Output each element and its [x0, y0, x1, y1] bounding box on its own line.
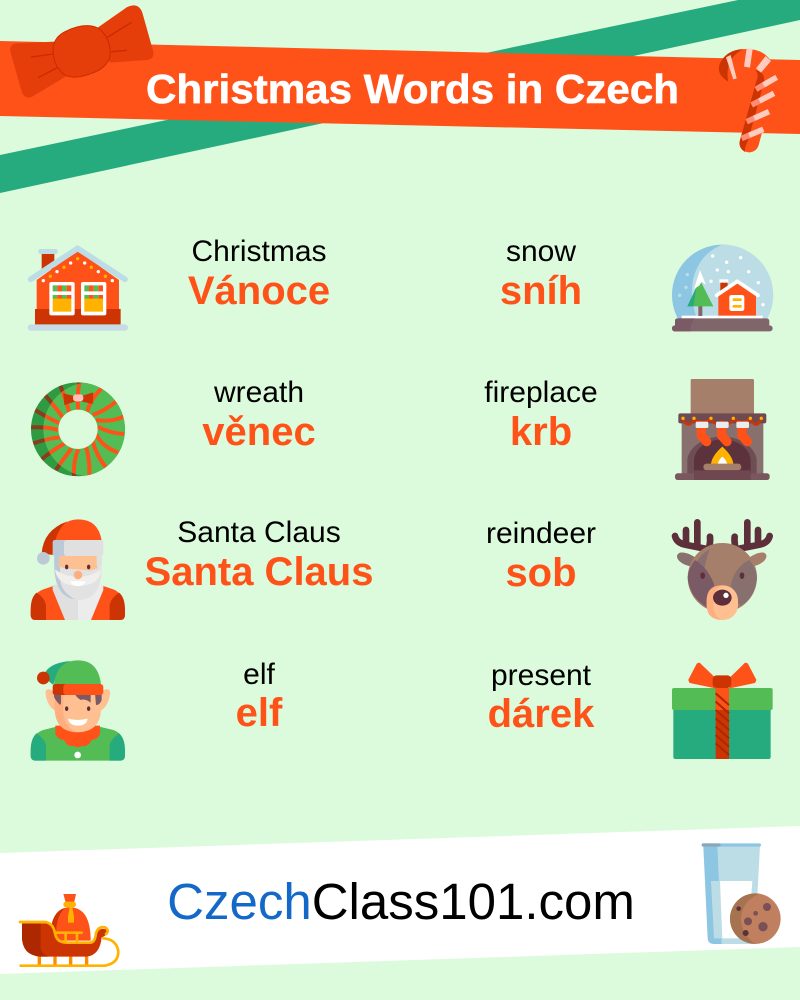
word pair: elf — [236, 658, 283, 735]
word pair: wreath: věnec — [202, 410, 316, 454]
word pair: fireplace — [484, 376, 598, 454]
word pair: reindeer: reindeer — [486, 517, 596, 550]
word pair: elf: elf — [243, 658, 276, 691]
word pair: fireplace: krb — [510, 410, 572, 454]
word pair: Christmas: Christmas — [191, 235, 327, 268]
word pair: elf: elf — [236, 691, 283, 735]
icon: sleigh with sack — [20, 894, 118, 966]
word pair: Christmas: Vánoce — [188, 269, 330, 313]
green diagonal band — [0, 0, 800, 193]
red title ribbon — [0, 41, 800, 134]
word pair: Santa Claus: Santa Claus — [145, 550, 373, 594]
icon: wreath — [31, 382, 125, 476]
word pair: reindeer — [486, 517, 596, 595]
icon: fireplace — [675, 379, 770, 480]
white footer band — [0, 826, 800, 974]
title: Christmas Words in Czech — [146, 66, 679, 112]
icon: Santa Claus — [31, 519, 125, 620]
icon: candy cane — [719, 48, 777, 152]
word pair: snow: sníh — [500, 269, 582, 313]
word pair: present: present — [491, 659, 592, 692]
icon: reindeer — [675, 522, 770, 620]
word pair: Santa Claus — [145, 516, 373, 594]
word pair: snow: snow — [506, 235, 576, 268]
footer website text: CzechClass101.com — [167, 873, 635, 930]
word pair: present: dárek — [488, 692, 595, 736]
word pair: wreath: wreath — [213, 376, 304, 409]
icon: gift box — [672, 663, 773, 759]
word pair: Santa Claus: Santa Claus — [177, 516, 341, 549]
icon: elf — [31, 660, 125, 761]
word pair: reindeer: sob — [505, 551, 577, 595]
icon: snow globe — [672, 244, 774, 332]
icon: house — [28, 248, 128, 331]
icon: bow on ribbon — [10, 5, 153, 98]
icon: glass of milk and cookie — [702, 843, 781, 944]
word pair: present — [488, 659, 595, 736]
word pair: wreath — [202, 376, 316, 454]
word pair: Christmas — [188, 235, 330, 313]
word pair: snow — [500, 235, 582, 313]
word pair: fireplace: fireplace — [484, 376, 598, 409]
